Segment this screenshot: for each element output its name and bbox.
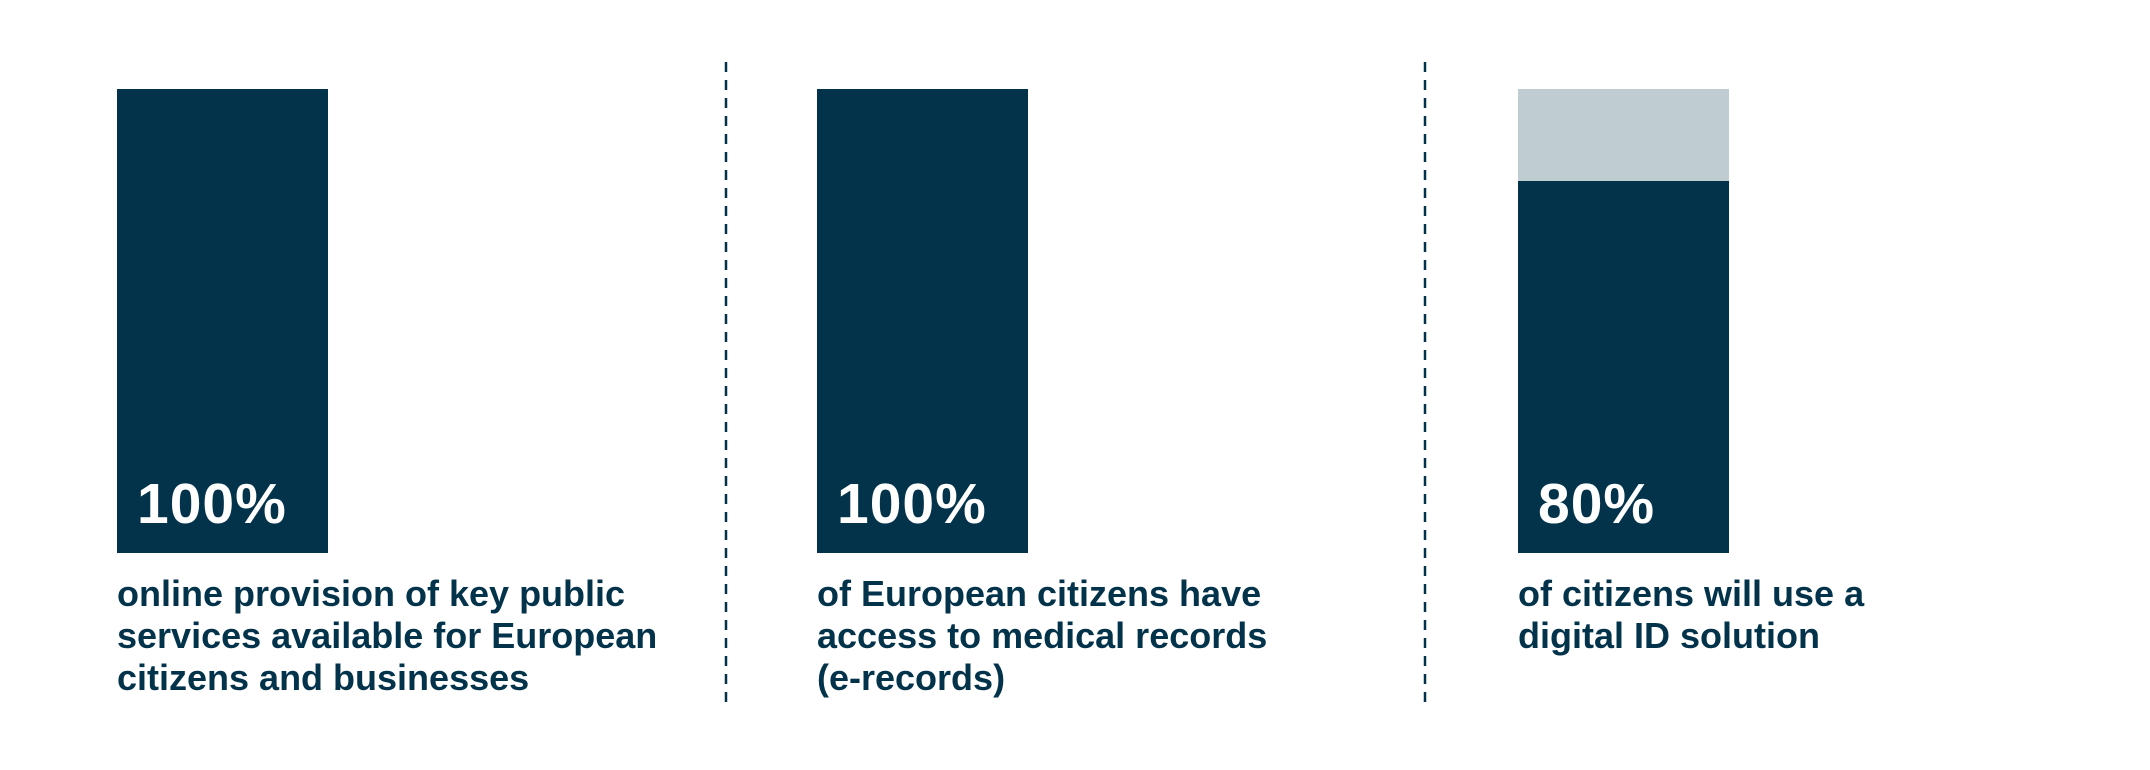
value label: 100% [837,472,987,536]
caption: access to medical records [817,615,1267,656]
bar: 80% [1518,89,1729,553]
caption: digital ID solution [1518,615,1820,656]
caption: services available for European [117,615,657,656]
caption [1518,573,1864,656]
value label: 100% [137,472,287,536]
bar: 100% [117,89,328,553]
caption: of citizens will use a [1518,573,1864,614]
panel: digital ID [1518,89,1864,656]
panel: online public services [117,89,657,698]
caption [117,573,657,698]
caption: of European citizens have [817,573,1261,614]
caption: online provision of key public [117,573,625,614]
caption: citizens and businesses [117,657,529,698]
value label: 80% [1538,472,1655,536]
caption: (e-records) [817,657,1005,698]
caption [817,573,1267,698]
panel: medical records [817,89,1267,698]
bar: 100% [817,89,1028,553]
